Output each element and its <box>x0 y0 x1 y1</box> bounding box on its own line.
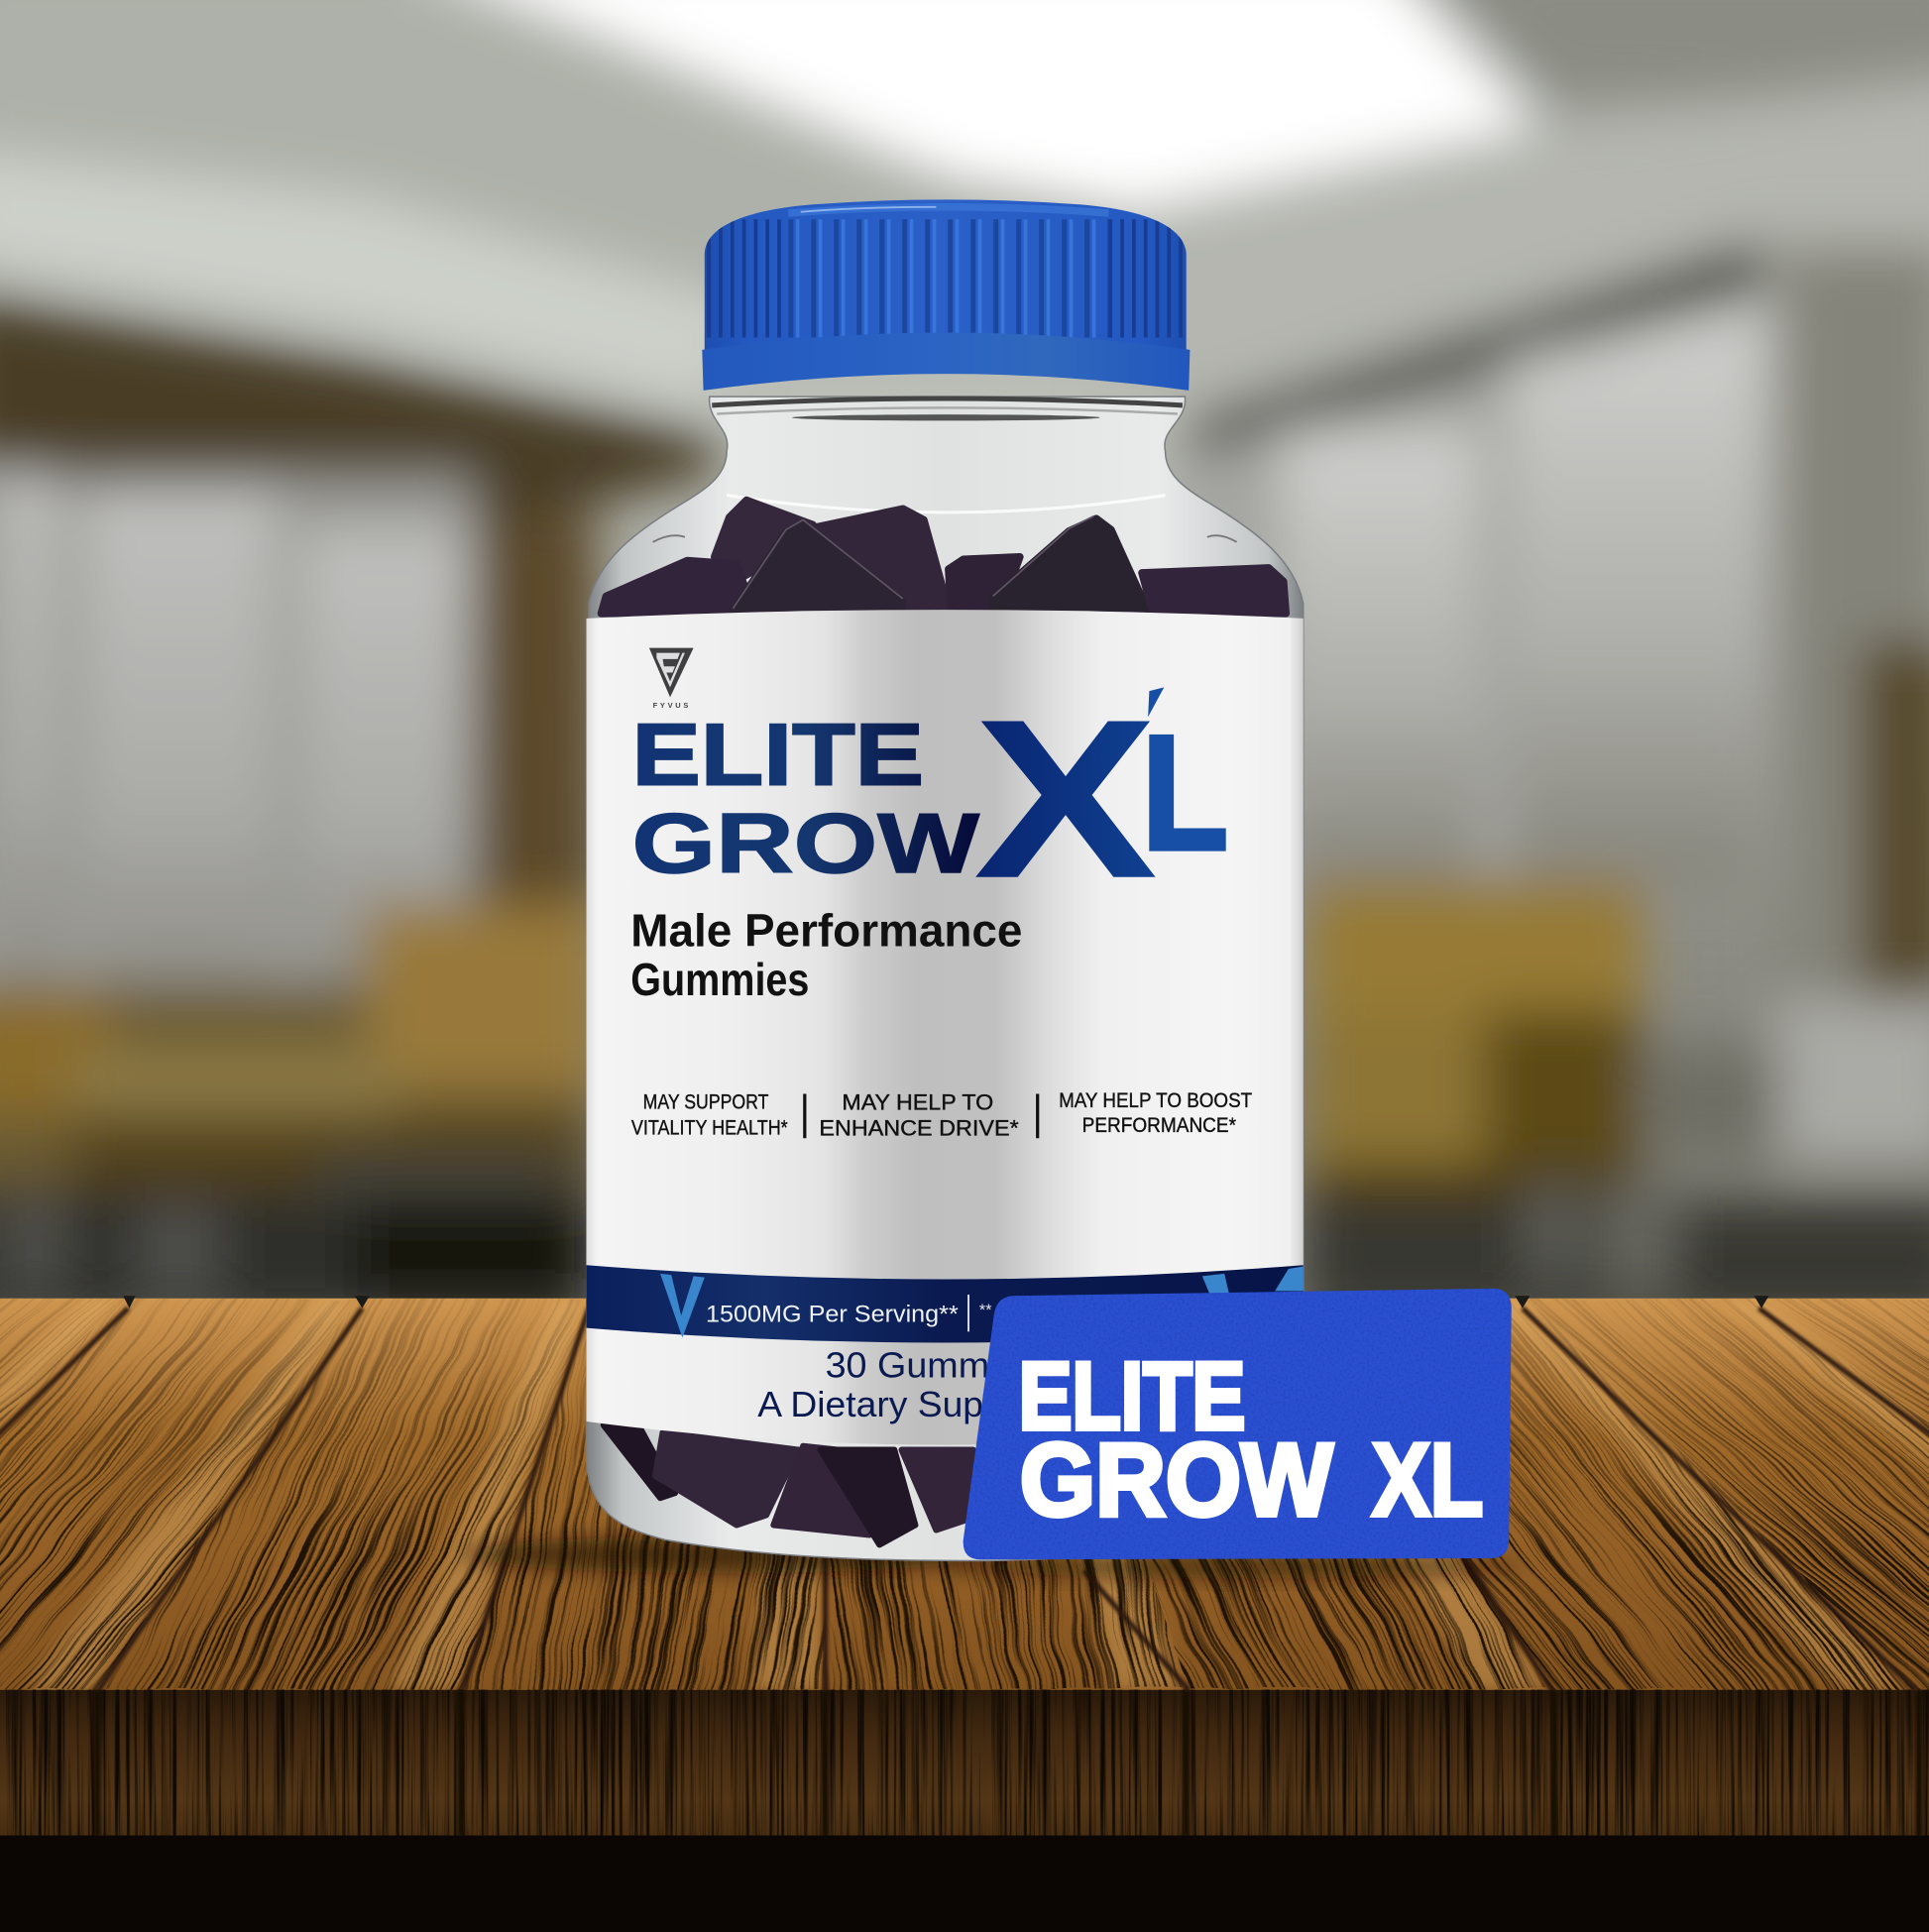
product logo: ELITE <box>631 706 924 804</box>
wood grain plank 2 <box>0 1299 356 1689</box>
shadow under bottle and card <box>462 1536 1522 1578</box>
cap band <box>702 333 1190 391</box>
wood grain plank 1 <box>0 1299 123 1422</box>
wood grain plank 4 <box>464 1330 825 1690</box>
benefit 3 <box>1059 1089 1252 1137</box>
benefit 1: MAY SUPPORT <box>643 1090 768 1113</box>
gummies bottom <box>604 1425 973 1544</box>
benefit 2: ENHANCE DRIVE* <box>819 1116 1019 1141</box>
wooden table top <box>0 1299 1929 1690</box>
product logo <box>631 673 1228 926</box>
wood grain plank 5 <box>826 1558 1186 1690</box>
bottle cap <box>702 199 1190 391</box>
serving band <box>587 1265 1304 1343</box>
divider <box>803 1093 806 1138</box>
back edge of table plank notches <box>123 1296 1768 1308</box>
brand logo mark <box>649 648 694 710</box>
card text: XL <box>1372 1422 1483 1537</box>
table underside shadow <box>0 1836 1929 1932</box>
divider <box>1036 1093 1039 1138</box>
plank edge highlights <box>0 1299 1929 1690</box>
benefit 2 <box>819 1090 1019 1141</box>
card text: GROW <box>1020 1422 1333 1537</box>
product subtitle <box>630 904 1022 1005</box>
count and supplement text: 30 Gummies <box>826 1344 1037 1385</box>
wood grain plank 6 <box>1149 1558 1545 1690</box>
product logo: GROW <box>631 796 979 891</box>
product logo: X <box>973 673 1158 926</box>
table front edge <box>0 1690 1929 1838</box>
gummies top <box>601 501 1286 614</box>
benefit 3: PERFORMANCE* <box>1082 1114 1236 1137</box>
blurred room background <box>0 0 1929 1324</box>
benefit 1: VITALITY HEALTH* <box>631 1116 788 1139</box>
label <box>587 610 1304 1445</box>
wood grain plank 3 <box>105 1299 582 1690</box>
brand logo mark: FYVUS <box>653 701 691 710</box>
count and supplement text: A Dietary Supplement <box>757 1384 1115 1424</box>
blue card <box>964 1289 1512 1559</box>
card text: ELITE <box>1019 1341 1245 1449</box>
plank gaps <box>0 1308 1929 1690</box>
wood grain plank 8 <box>1529 1299 1929 1690</box>
card text <box>1019 1341 1483 1537</box>
product subtitle: Gummies <box>630 954 809 1005</box>
product logo: L <box>1142 702 1228 883</box>
bottle <box>587 397 1304 1560</box>
wood grain <box>0 1299 1929 1690</box>
wood grain plank 9 <box>1776 1299 1929 1425</box>
glass body <box>587 397 1304 1560</box>
benefit 3: MAY HELP TO BOOST <box>1059 1089 1252 1112</box>
cap ribs <box>707 231 1185 326</box>
card texture <box>964 1289 1512 1559</box>
product subtitle: Male Performance <box>630 904 1022 956</box>
wood grain plank 7 <box>1467 1299 1915 1690</box>
serving band: ** <box>979 1302 992 1319</box>
benefit 2: MAY HELP TO <box>842 1090 993 1115</box>
serving band: 1500MG Per Serving** <box>706 1302 959 1327</box>
neck highlights <box>653 398 1237 542</box>
benefit 1 <box>631 1090 788 1139</box>
count and supplement text <box>757 1344 1115 1424</box>
